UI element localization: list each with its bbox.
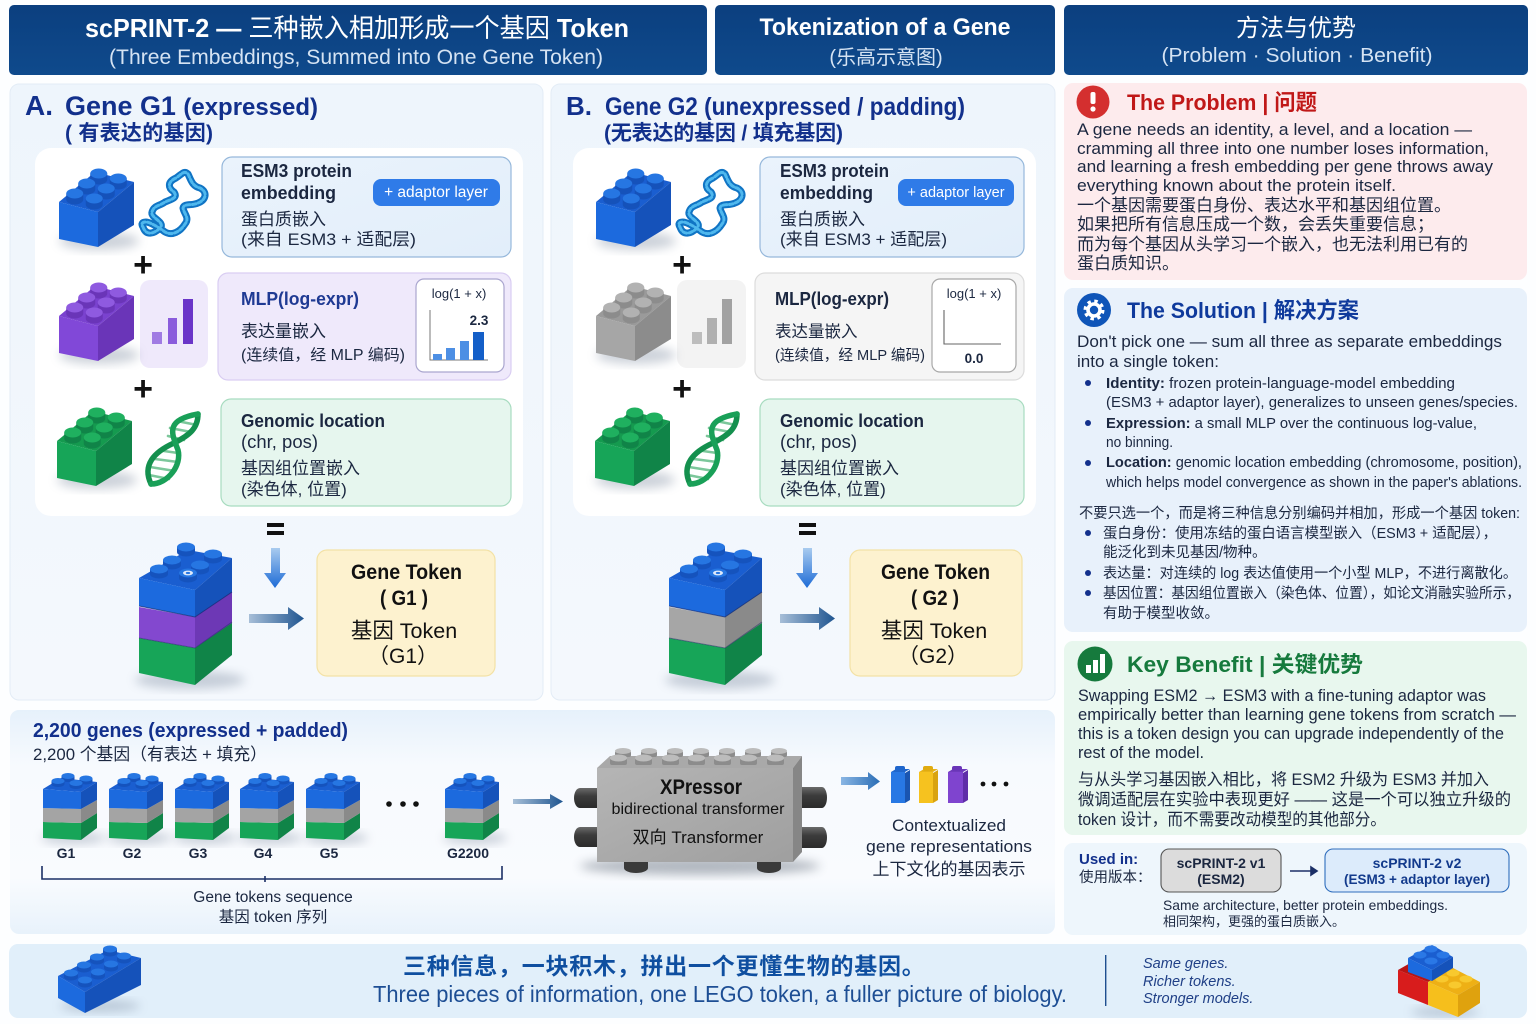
box: gene token G1: Gene Token [351,560,462,584]
text: solution chinese: 有助于模型收敛。 [1103,605,1219,622]
box: ESM3 protein embedding [760,157,1024,257]
footer banner [9,944,1527,1018]
text: benefit english: Swapping ESM2 → ESM3 with a fine-tuning adaptor was [1078,687,1486,705]
arrow: into XPressor [513,794,563,809]
bracket: gene tokens sequence: Gene tokens sequence [193,889,353,906]
icon: gear [1077,293,1111,327]
italic summary: Same genes. [1143,956,1228,972]
icon: contextualized tokens [891,766,1008,803]
panel: key benefit [1064,641,1527,835]
heading: key benefit: Key Benefit | 关键优势 [1127,652,1363,677]
arrow: down [264,548,286,588]
box: genomic location: 基因组位置嵌入 [780,459,899,478]
divider [1105,955,1106,1006]
header: center title: Tokenization of a Gene [760,14,1010,41]
text: solution english: Expression: a small MLP over the continuous log-value, [1106,416,1477,432]
arrow: down [796,548,818,588]
header: center title [715,5,1055,75]
icon: exclamation [1076,86,1110,118]
box: genomic location: (染色体, 位置) [780,480,886,499]
box: gene token G2: ( G2 ) [911,586,959,610]
box: MLP log-expr gray: (连续值，经 MLP 编码) [775,347,925,364]
header: left title: scPRINT-2 — 三种嵌入相加形成一个基因 Token [85,13,629,43]
header: right title: 方法与优势 [1236,15,1356,42]
header: center title: (乐高示意图) [829,46,943,69]
plus sign: + [672,246,692,284]
pill: adaptor layer: + adaptor layer [384,184,488,201]
block: XPressor: XPressor [660,776,742,799]
box: MLP log-expr: 表达量嵌入 [241,322,326,341]
heading: 2,200 genes: 2,200 genes (expressed + padded) [33,720,348,742]
panel B white card [573,148,1036,516]
arrow: out of XPressor [841,772,880,790]
equals sign [799,523,816,535]
box: scPRINT-2 v2: (ESM3 + adaptor layer) [1344,871,1490,887]
panel: used in versions [1064,843,1527,935]
heading: the problem: The Problem | 问题 [1127,90,1317,115]
token sequence: G1 [57,845,76,861]
heading: the solution: The Solution | 解决方案 [1127,298,1359,323]
block: XPressor: bidirectional transformer [612,801,785,818]
text: problem chinese: 蛋白质知识。 [1077,254,1179,273]
box: MLP log-expr: MLP(log-expr) [241,289,359,309]
panel B heading: (无表达的基因 / 填充基因) [604,122,843,145]
text: solution chinese: 能泛化到未见基因/物种。 [1103,544,1267,561]
icon: three-color bricks [1398,945,1480,1017]
panel A heading: Gene G1 (expressed) [65,91,318,121]
text: solution english: which helps model convergence as shown in the paper's ablations. [1105,475,1522,491]
text: benefit english: empirically better than learning gene tokens from scratch — [1078,706,1517,724]
panel B heading: B. [566,91,592,121]
box: ESM3 protein embedding: embedding [241,183,336,203]
arrow: right to token [249,607,304,630]
box: genomic location: (chr, pos) [241,432,318,452]
text: contextualized gene representations [866,816,1032,879]
arrow: right to token [780,607,835,630]
text: solution english: Don't pick one — sum all three as separate embeddings [1077,332,1502,351]
header: right title [1064,5,1528,75]
chart: log expression value 0.0: log(1 + x) [947,286,1001,301]
box: ESM3 protein embedding: 蛋白质嵌入 [241,210,326,229]
token sequence: G2200 [447,845,489,861]
panel A: Gene G1 expressed [10,84,543,700]
bracket: gene tokens sequence [42,866,502,926]
equals sign [267,523,284,535]
header: left title: (Three Embeddings, Summed into One Gene Token) [109,45,603,69]
text: same architecture: Same architecture, better protein embeddings. [1163,897,1448,913]
tagline: 三种信息，一块积木，拼出一个更懂生物的基因。 [403,953,926,979]
box: gene token G2 [850,550,1022,676]
text: problem english: cramming all three into one number loses information, [1077,139,1489,158]
icon: gray padded expression brick [596,280,746,368]
block: XPressor [574,748,827,875]
panel: 2,200 genes sequence and XPressor [10,710,1055,934]
token sequence: G2 [123,845,142,861]
icon: blue protein brick [59,168,139,250]
box: gene token G2: Gene Token [881,560,990,584]
bracket: gene tokens sequence: 基因 token 序列 [219,908,327,926]
token sequence: G5 [320,845,339,861]
text: solution chinese: 蛋白身份：使用冻结的蛋白语言模型嵌入（ESM3 + 适配层）， [1103,524,1497,542]
text: solution english: Location: genomic location embedding (chromosome, position), [1106,455,1522,471]
text: solution chinese [1079,505,1520,622]
box: ESM3 protein embedding [222,157,511,257]
box: scPRINT-2 v1 [1161,849,1281,892]
icon: stacked token tower G1 [135,542,245,689]
icon: DNA helix [148,414,198,484]
icon: blue protein brick [596,168,676,250]
icon: green location brick [595,408,675,489]
token sequence [41,773,507,861]
box: scPRINT-2 v2: scPRINT-2 v2 [1373,855,1462,871]
box: MLP log-expr gray: 表达量嵌入 [775,322,858,341]
box: scPRINT-2 v1: scPRINT-2 v1 [1177,855,1266,871]
token sequence: G3 [189,845,208,861]
text: solution english: Identity: frozen protein-language-model embedding [1106,376,1455,392]
box: genomic location: Genomic location [780,411,924,431]
box: genomic location: (染色体, 位置) [241,480,347,499]
tagline: Three pieces of information, one LEGO token, a fuller picture of biology. [373,981,1067,1007]
text: benefit english: rest of the model. [1078,744,1204,762]
chart: log expression value 0.0 [932,279,1016,372]
box: gene token G2: 基因 Token [881,619,987,643]
box: scPRINT-2 v2 [1325,849,1509,892]
plus sign: + [133,246,153,284]
heading: 2,200 genes: 2,200 个基因（有表达 + 填充） [33,745,267,764]
heading: 2,200 genes [33,720,348,764]
text: same architecture: 相同架构，更强的蛋白质嵌入。 [1163,914,1345,929]
panel B: Gene G2 unexpressed [551,84,1055,700]
text: benefit chinese: token 设计，而不需要改动模型的其他部分。 [1078,810,1386,829]
box: genomic location [760,399,1024,506]
text: benefit chinese: 与从头学习基因嵌入相比，将 ESM2 升级为 ESM3 并加入 [1078,770,1489,789]
pill: adaptor layer [898,179,1014,206]
text: problem english [1077,120,1494,195]
panel A heading: A. [25,90,53,121]
label: used in: Used in: [1079,851,1138,868]
icon: protein ribbon [142,172,205,234]
pill: adaptor layer: + adaptor layer [907,185,1005,201]
text: solution english: (ESM3 + adaptor layer), generalizes to unseen genes/species. [1106,395,1518,411]
box: gene token G1 [317,550,495,676]
text: contextualized gene representations: Contextualized [892,816,1006,835]
panel A white card [35,148,523,516]
text: solution chinese: 表达量：对连续的 log 表达值使用一个小型 MLP，不进行离散化。 [1103,565,1517,582]
token sequence: G4 [254,845,273,861]
box: ESM3 protein embedding: ESM3 protein [241,161,352,181]
box: genomic location: 基因组位置嵌入 [241,459,360,478]
panel: the problem [1064,83,1527,280]
box: genomic location: (chr, pos) [780,432,857,452]
tagline [373,953,1067,1007]
icon: protein ribbon [679,172,742,234]
italic summary: Richer tokens. [1143,974,1236,990]
box: gene token G1: （G1） [368,645,438,668]
text: benefit english [1078,687,1517,762]
box: ESM3 protein embedding: embedding [780,183,873,203]
icon: stacked token tower G2 [665,542,775,689]
text: benefit chinese: 微调适配层在实验中表现更好 —— 这是一个可以独立升级的 [1078,790,1511,809]
italic summary [1143,956,1253,1007]
panel B heading [566,91,965,145]
chart: log expression value 0.0: 0.0 [965,351,983,366]
plus sign: + [133,370,153,408]
panel A heading: ( 有表达的基因) [65,122,213,145]
box: ESM3 protein embedding: 蛋白质嵌入 [780,210,865,229]
text: solution english: into a single token: [1077,352,1219,371]
text: contextualized gene representations: 上下文化的基因表示 [872,860,1026,879]
icon: green location brick [57,408,137,489]
label: used in: 使用版本： [1079,869,1152,886]
block: XPressor: 双向 Transformer [633,828,764,847]
box: scPRINT-2 v1: (ESM2) [1197,871,1245,887]
text: problem chinese: 如果把所有信息压成一个数，会丢失重要信息； [1077,215,1434,234]
text: problem chinese: 而为每个基因从头学习一个嵌入，也无法利用已有的 [1077,235,1468,254]
text: problem chinese [1077,196,1468,273]
pill: adaptor layer [373,179,500,206]
box: gene token G1: 基因 Token [351,619,457,643]
box: MLP log-expr gray: MLP(log-expr) [775,289,889,309]
text: problem chinese: 一个基因需要蛋白身份、表达水平和基因组位置。 [1077,196,1451,215]
header: right title: (Problem · Solution · Benefit) [1162,44,1432,67]
icon: long blue brick [58,946,141,1013]
box: ESM3 protein embedding: (来自 ESM3 + 适配层) [780,230,947,249]
panel: the solution [1064,288,1527,632]
box: genomic location: Genomic location [241,411,385,431]
text: benefit chinese [1078,770,1511,829]
box: MLP log-expr gray [755,273,1024,380]
icon: purple expression brick [59,280,208,368]
panel B heading: Gene G2 (unexpressed / padding) [605,93,965,121]
plus sign: + [672,370,692,408]
header: left title [9,5,707,75]
box: MLP log-expr [218,273,511,380]
text: solution chinese: 基因位置：基因组位置嵌入（染色体、位置），如论文消融实验所示， [1103,585,1520,602]
label: used in [1079,851,1152,886]
text: problem english: A gene needs an identity, a level, and a location — [1077,120,1472,139]
box: MLP log-expr: (连续值，经 MLP 编码) [241,346,405,364]
text: solution chinese: 不要只选一个，而是将三种信息分别编码并相加，形成一个基因 token: [1079,505,1520,522]
box: genomic location [221,399,511,506]
icon: DNA helix [687,414,737,484]
chart: log expression value 2.3 [416,279,504,372]
text: same architecture [1163,897,1448,929]
text: solution english: no binning. [1106,435,1173,451]
text: benefit english: this is a token design you can upgrade independently of the [1078,725,1504,743]
italic summary: Stronger models. [1143,991,1253,1007]
text: solution english [1077,332,1522,491]
box: ESM3 protein embedding: (来自 ESM3 + 适配层) [241,230,416,249]
icon: bar chart [1078,646,1112,682]
chart: log expression value 2.3: log(1 + x) [432,286,486,301]
box: gene token G2: （G2） [898,645,968,668]
text: contextualized gene representations: gene representations [866,837,1032,856]
chart: log expression value 2.3: 2.3 [470,313,489,328]
panel A heading [25,90,318,145]
arrow: v1 to v2 [1290,867,1317,875]
text: problem english: and learning a fresh embedding per gene throws away [1077,157,1494,176]
text: problem english: everything known about the protein itself. [1077,176,1396,195]
box: ESM3 protein embedding: ESM3 protein [780,161,889,181]
box: gene token G1: ( G1 ) [380,586,428,610]
